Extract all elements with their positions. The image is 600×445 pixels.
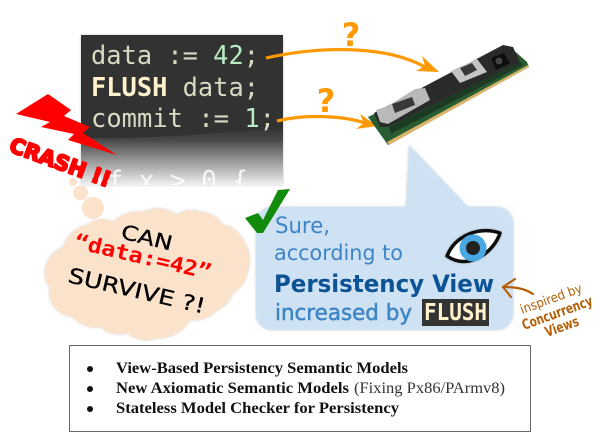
question mark: upper arrow: ?: [342, 16, 360, 54]
bullet item: view-based models: View-Based Persistency Semantic Models: [116, 360, 408, 377]
code line: faded if condition: if x > 0 {: [92, 166, 248, 196]
bullet item: axiomatic models: New Axiomatic Semantic Models: [116, 380, 349, 397]
note: inspired by Concurrency Views: Views: [543, 314, 581, 341]
arrow: inspired by pointer: [503, 279, 533, 297]
FLUSH badge: FLUSH: [424, 300, 487, 326]
code line: commit := 1: commit := 1;: [91, 104, 275, 134]
icon: red lightning bolt: [16, 94, 117, 155]
thought cloud: [45, 208, 249, 340]
bubble text: according to: according to: [274, 241, 403, 265]
cloud text: data:=42: “data:=42”: [72, 229, 214, 284]
speech bubble: [256, 145, 513, 330]
bubble text: Sure: Sure,: [275, 214, 330, 239]
bubble text: Persistency View: Persistency View: [274, 270, 494, 298]
code line: FLUSH data: FLUSH data;: [91, 73, 259, 103]
icon: green check mark: [245, 189, 290, 233]
cloud text: SURVIVE: SURVIVE ?!: [66, 263, 208, 318]
thought bubble trail: [69, 178, 104, 219]
panel: code snippet: [81, 35, 283, 196]
icon: eye: [447, 231, 500, 262]
bullet item: model checker: Stateless Model Checker for Persistency: [116, 400, 399, 417]
question mark: lower arrow: ?: [317, 82, 335, 120]
bullet item: axiomatic models: (Fixing Px86/PArmv8): [354, 380, 505, 397]
arrow: commit write to memory module: [277, 114, 377, 129]
note: inspired by Concurrency Views: inspired by: [518, 281, 585, 318]
arrow: data write to memory module: [266, 50, 439, 72]
icon: persistent memory module: [368, 45, 529, 145]
code line: data := 42: data := 42;: [91, 41, 259, 71]
bullet item: axiomatic models: [87, 380, 505, 397]
bubble text: increased by: increased by: [275, 301, 412, 326]
panel: key contributions list: [70, 346, 530, 432]
label: CRASH: CRASH !!: [6, 133, 114, 192]
cloud text: CAN: CAN: [119, 220, 175, 255]
